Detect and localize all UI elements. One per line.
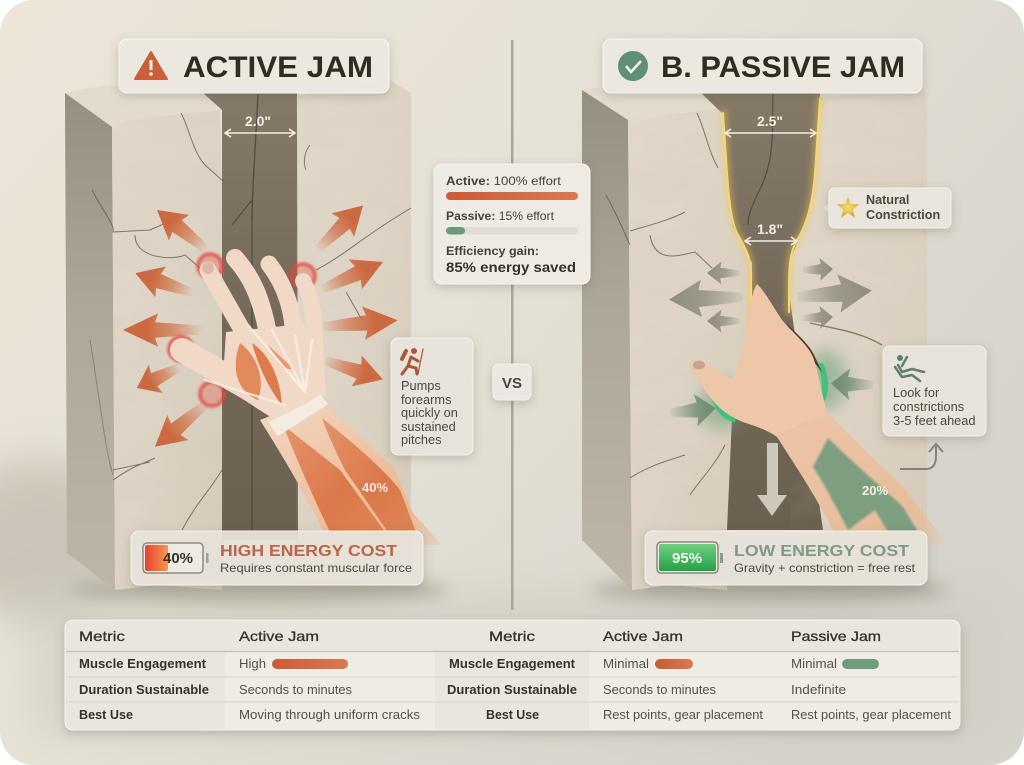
crack width: 2.5 inches: 2.5" bbox=[757, 113, 783, 129]
efficiency value: 85% energy saved bbox=[446, 259, 576, 275]
subtext: Gravity + constriction = free rest bbox=[734, 561, 916, 575]
icon: battery 95% bbox=[657, 542, 723, 573]
callout text: Natural bbox=[866, 193, 909, 207]
friction arrows: passive bbox=[668, 257, 873, 333]
icon: warning triangle bbox=[135, 52, 167, 79]
passive effort bar bbox=[446, 227, 578, 234]
table: metric comparison bbox=[65, 620, 960, 730]
heading text: ACTIVE JAM bbox=[183, 51, 373, 84]
row: duration sustainable: Indefinite bbox=[791, 683, 846, 697]
rock block: active bbox=[60, 80, 450, 604]
table header: Active Jam bbox=[603, 628, 683, 644]
row: muscle engagement: High bbox=[239, 657, 266, 671]
centre divider bbox=[511, 40, 514, 610]
pressure points: active bbox=[169, 254, 315, 406]
table header: Active Jam bbox=[239, 628, 319, 644]
row: muscle engagement: Muscle Engagement bbox=[79, 657, 207, 671]
vs badge: VS bbox=[502, 375, 522, 392]
green contact glows bbox=[698, 350, 847, 429]
row: muscle engagement: Minimal bbox=[603, 657, 649, 671]
callout: forearm pump bbox=[391, 338, 473, 455]
table header: Passive Jam bbox=[791, 628, 881, 644]
crack width: 1.8 inches: 1.8" bbox=[757, 221, 783, 237]
callout: effort comparison bbox=[434, 164, 590, 284]
floor shading bbox=[30, 590, 1000, 740]
gravity arrow bbox=[757, 443, 787, 516]
callout text: constrictions bbox=[893, 399, 964, 414]
row: best use: Moving through uniform cracks bbox=[239, 708, 420, 722]
row: duration sustainable: Duration Sustainable bbox=[447, 683, 577, 697]
callout text: sustained bbox=[401, 419, 456, 434]
callout text: Constriction bbox=[866, 208, 940, 222]
heading text: B. PASSIVE JAM bbox=[661, 51, 905, 84]
subtext: Requires constant muscular force bbox=[220, 561, 412, 575]
heading: HIGH ENERGY COST bbox=[220, 543, 397, 560]
table header bbox=[79, 628, 881, 644]
forearm label: 40%: 40% bbox=[362, 480, 388, 495]
callout text: quickly on bbox=[401, 405, 458, 420]
row: best use bbox=[79, 708, 952, 722]
callout text: 3-5 feet ahead bbox=[893, 413, 976, 428]
icon: battery 95%: 95% bbox=[672, 550, 702, 567]
panel: active jam illustration bbox=[60, 80, 450, 604]
row: best use: Best Use bbox=[79, 708, 133, 722]
callout text: Look for bbox=[893, 385, 940, 400]
icon: star bbox=[837, 197, 859, 218]
callout: natural constriction bbox=[823, 188, 951, 228]
icon: battery 40%: 40% bbox=[163, 550, 193, 567]
callout text: pitches bbox=[401, 432, 442, 447]
force arrows: active bbox=[123, 194, 399, 459]
row: muscle engagement: Muscle Engagement bbox=[449, 657, 576, 671]
row: duration sustainable bbox=[79, 683, 846, 697]
row: best use: Rest points, gear placement bbox=[603, 708, 764, 722]
arrow: look ahead bbox=[900, 444, 943, 469]
row: duration sustainable: Duration Sustainable bbox=[79, 683, 209, 697]
rock cracks: active bbox=[90, 113, 411, 530]
hand and forearm: active bbox=[182, 258, 442, 545]
active effort label: Active: 100% effort bbox=[446, 174, 562, 188]
support arrows: passive bbox=[668, 368, 874, 429]
passive effort label: Passive: 15% effort bbox=[446, 209, 555, 223]
row: muscle engagement bbox=[79, 657, 879, 671]
efficiency label: Efficiency gain: bbox=[446, 244, 539, 258]
hand and forearm: passive bbox=[690, 284, 948, 545]
icon: battery 40% bbox=[143, 543, 208, 573]
title: passive jam bbox=[603, 39, 922, 93]
floor shadow left bbox=[0, 460, 135, 620]
icon: hiker bbox=[402, 348, 423, 374]
callout text: forearms bbox=[401, 392, 452, 407]
vs badge bbox=[493, 364, 531, 400]
forearm label: 20%: 20% bbox=[862, 483, 888, 498]
active effort bar bbox=[446, 192, 578, 200]
table header: Metric bbox=[489, 628, 535, 644]
panel: high energy cost bbox=[131, 531, 423, 585]
rock cracks: passive bbox=[606, 113, 882, 495]
crack width: 1.8 inches bbox=[745, 221, 797, 245]
constriction glow bbox=[723, 98, 820, 330]
row: best use: Rest points, gear placement bbox=[791, 708, 952, 722]
panel: low energy cost bbox=[645, 531, 927, 585]
heading: LOW ENERGY COST bbox=[734, 543, 909, 560]
title: active jam bbox=[119, 39, 389, 93]
row: muscle engagement: Minimal bbox=[791, 657, 837, 671]
table header: Metric bbox=[79, 628, 125, 644]
callout: look ahead bbox=[883, 346, 986, 436]
icon: check circle bbox=[618, 51, 648, 81]
row: duration sustainable: Seconds to minutes bbox=[239, 683, 352, 697]
row: duration sustainable: Seconds to minutes bbox=[603, 683, 716, 697]
rock block: passive bbox=[578, 80, 950, 604]
row: best use: Best Use bbox=[486, 708, 539, 722]
panel: passive jam illustration bbox=[578, 80, 950, 604]
icon: falling climber bbox=[895, 356, 924, 381]
callout text: Pumps bbox=[401, 378, 441, 393]
crack width: 2.0 inches bbox=[225, 113, 295, 137]
crack width: 2.0 inches: 2.0" bbox=[245, 113, 271, 129]
crack width: 2.5 inches bbox=[725, 113, 816, 137]
